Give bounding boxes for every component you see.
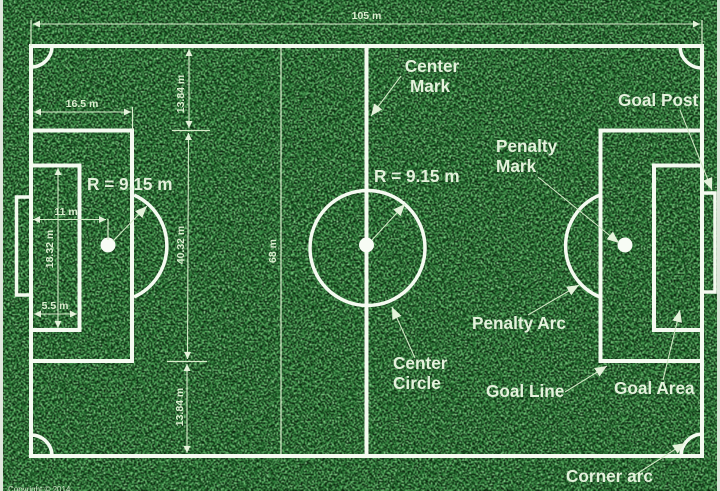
11 m dimension bbox=[33, 206, 108, 240]
18.32 m dimension: 18.32 m bbox=[44, 230, 56, 268]
left goal bbox=[16, 197, 31, 295]
left goal area bbox=[31, 166, 80, 330]
center circle label: Circle bbox=[393, 373, 441, 393]
16.5 m dimension: 16.5 m bbox=[66, 98, 98, 110]
goal area label: Goal Area bbox=[614, 378, 695, 398]
left penalty mark bbox=[100, 238, 116, 252]
105 m dimension bbox=[31, 10, 702, 46]
5.5 m dimension: 5.5 m bbox=[42, 300, 68, 312]
11 m dimension: 11 m bbox=[54, 206, 78, 218]
penalty mark label: Penalty bbox=[496, 136, 558, 156]
center mark label bbox=[371, 56, 460, 116]
center mark label: Mark bbox=[410, 76, 451, 96]
center radius label: R = 9.15 m bbox=[374, 166, 460, 186]
goal line label: Goal Line bbox=[486, 381, 564, 401]
left penalty area bbox=[31, 130, 132, 361]
40.32 m dimension: 40.32 m bbox=[175, 226, 187, 264]
penalty arc label: Penalty Arc bbox=[472, 313, 566, 333]
5.5 m dimension bbox=[34, 300, 77, 314]
center radius label bbox=[372, 166, 460, 240]
left radius label: R = 9.15 m bbox=[87, 174, 173, 194]
center mark bbox=[359, 238, 374, 252]
top 13.84 m dimension bbox=[172, 49, 210, 130]
arrows and labels bbox=[87, 56, 712, 486]
goal post label bbox=[618, 90, 712, 190]
16.5 m dimension bbox=[34, 98, 132, 130]
penalty arc label bbox=[472, 285, 579, 333]
right penalty mark bbox=[618, 238, 632, 252]
halfway line bbox=[364, 46, 368, 456]
penalty mark label bbox=[496, 136, 619, 243]
105 m dimension: 105 m bbox=[352, 10, 381, 22]
corner arc label bbox=[566, 443, 685, 486]
goal post label: Goal Post bbox=[618, 90, 698, 110]
left radius label bbox=[87, 174, 173, 241]
top 13.84 m dimension: 13.84 m bbox=[175, 75, 187, 113]
68 m dimension: 68 m bbox=[267, 239, 279, 263]
goal area label bbox=[614, 310, 695, 398]
bottom 13.84 m dimension: 13.84 m bbox=[174, 388, 186, 426]
left penalty arc bbox=[134, 195, 167, 297]
outer boundary bbox=[31, 46, 702, 456]
corner arc label: Corner arc bbox=[566, 466, 653, 486]
center circle label: Center bbox=[393, 353, 448, 373]
center circle label bbox=[392, 307, 448, 393]
center circle bbox=[310, 190, 425, 306]
right goal area bbox=[654, 166, 702, 330]
right penalty area bbox=[600, 130, 702, 361]
goal line label bbox=[486, 366, 607, 401]
corner arcs bbox=[31, 46, 702, 456]
bottom 13.84 m dimension bbox=[167, 362, 207, 453]
penalty mark label: Mark bbox=[496, 156, 537, 176]
right goal bbox=[702, 193, 715, 292]
right penalty arc bbox=[566, 195, 600, 297]
center mark label: Center bbox=[405, 56, 460, 76]
